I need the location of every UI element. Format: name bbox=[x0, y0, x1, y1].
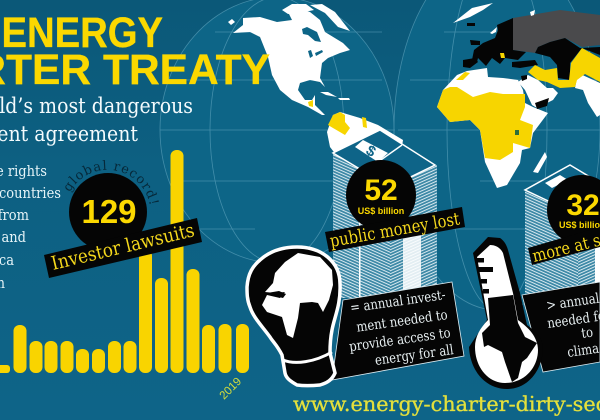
title bbox=[0, 8, 270, 94]
text box: annual investment for climate: to bbox=[580, 325, 594, 342]
illustration: banknote stack 1: $ bbox=[363, 142, 379, 161]
text box: annual investment for climate: clima bbox=[566, 341, 600, 361]
callout: 52 US$ billion: 52 bbox=[364, 174, 398, 207]
icon: thermometer with Africa globe bbox=[469, 237, 543, 389]
body text: left column: and bbox=[1, 229, 26, 246]
callout: global record 129: 129 bbox=[81, 193, 137, 230]
chart: investor lawsuits per year bbox=[0, 150, 249, 373]
text box: annual investment for energy: energy for all bbox=[374, 342, 455, 369]
label: investor lawsuits: Investor lawsuits bbox=[49, 219, 197, 275]
callout: global record 129: global record! bbox=[65, 160, 159, 204]
illustration: banknote stack 2 bbox=[525, 165, 600, 295]
illustration: banknote stack 1 bbox=[333, 130, 437, 298]
world map globe lobes and grid bbox=[160, 0, 600, 310]
text box: annual investment for climate: > annual bbox=[545, 291, 600, 314]
callout: 52 US$ billion bbox=[346, 160, 416, 230]
map: Europe and Central Asia members bbox=[463, 18, 600, 109]
text box: annual investment for energy: ment needed to bbox=[355, 307, 449, 336]
label: public money lost: public money lost bbox=[328, 208, 462, 251]
map: Greenland bbox=[453, 3, 493, 23]
subtitle bbox=[0, 93, 193, 146]
body text: left column bbox=[0, 163, 61, 292]
map: Scandinavia bbox=[490, 10, 535, 34]
map: South America bbox=[327, 112, 403, 160]
callout: 32 US$ billion bbox=[547, 175, 600, 245]
map: North and Central America bbox=[228, 4, 350, 115]
text box: annual investment for energy bbox=[332, 282, 464, 380]
chart year label: 2019 bbox=[218, 376, 244, 402]
map: Iran, Afghanistan, Pakistan and Mongolia members bbox=[528, 48, 600, 88]
callout: 52 US$ billion: US$ billion bbox=[358, 206, 404, 216]
map: Arabia and India bbox=[518, 73, 600, 117]
map: Russia bbox=[513, 10, 600, 53]
icon: light bulb with globe bbox=[247, 247, 340, 386]
map: Africa bbox=[437, 68, 548, 188]
callout: 32 US$ billion: 32 bbox=[566, 189, 600, 222]
body text: left column: countries bbox=[0, 185, 61, 202]
callout: global record 129 bbox=[65, 160, 159, 245]
text box: annual investment for energy: provide access to bbox=[348, 325, 452, 355]
text box: annual investment for climate bbox=[522, 282, 600, 372]
text box: annual investment for energy: = annual invest- bbox=[349, 287, 447, 317]
